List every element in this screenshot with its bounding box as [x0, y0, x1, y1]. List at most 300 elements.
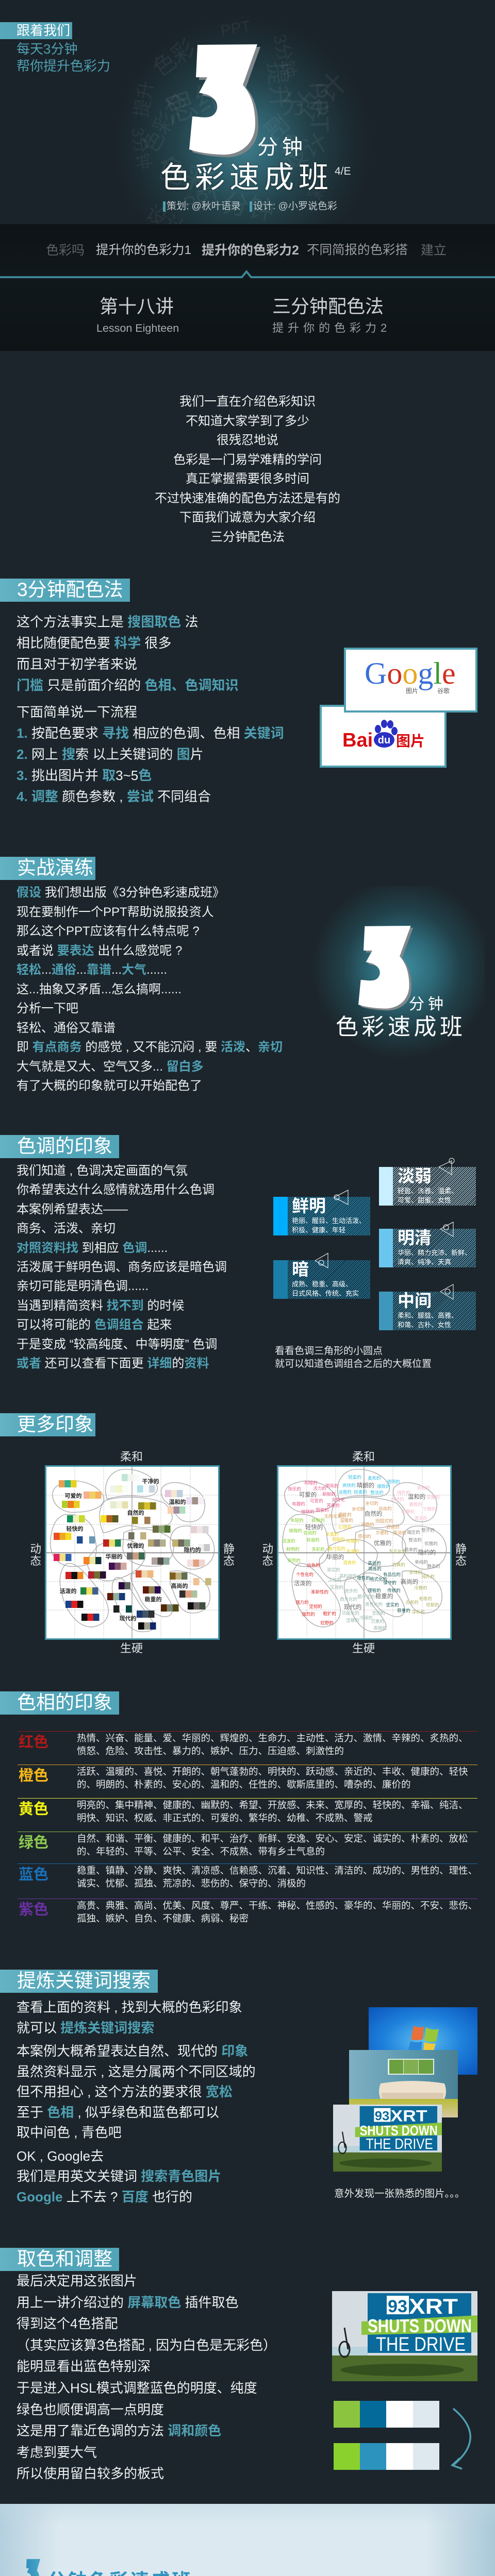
impression names: 可爱的: [299, 1491, 317, 1498]
adjectives: dark teal: 传统的: [387, 1588, 401, 1593]
text: pick and adjust: [16, 2273, 276, 2481]
small minutes: 分钟: [409, 996, 447, 1013]
text: practice case: 分析一下吧: [16, 1002, 78, 1015]
heading: tone impression: 色调的印象: [17, 1136, 112, 1157]
text: tone impression: [16, 1164, 227, 1370]
tag box: [0, 22, 72, 39]
text: tone impression: 对照资料找 到相应 色调......: [16, 1241, 168, 1255]
text: method steps: 相比随便配色要 科学 很多: [16, 635, 171, 651]
adjectives: yellow: [325, 1524, 359, 1565]
text: pick and adjust: 考虑到要大气: [16, 2445, 97, 2460]
adjectives: light pink: 雅致的: [409, 1502, 422, 1507]
text: pick and adjust: （其实应该算3色搭配 , 因为白色是无彩色）: [16, 2337, 276, 2353]
adjectives: yellow: 幸福的: [332, 1537, 345, 1542]
title: minutes: 分钟: [257, 136, 307, 159]
adjectives: pink: 明亮的: [325, 1483, 339, 1488]
chart: color swatch image scale: [31, 1450, 235, 1655]
text: pick and adjust: 用上一讲介绍过的 屏幕取色 插件取色: [16, 2295, 238, 2310]
impression names: 隐约的: [418, 1549, 436, 1556]
adjectives: light pink: 纯朴的: [397, 1490, 410, 1495]
adjectives: dark teal: 简练的: [368, 1566, 382, 1571]
impression names: 高尚的: [171, 1582, 188, 1589]
text: practice case: [16, 886, 283, 1093]
image: windows wallpaper: [369, 2007, 477, 2075]
tag box: 跟着我们: [16, 23, 70, 38]
text: practice case: 假设 我们想出版《3分钟色彩速成班》: [16, 886, 225, 900]
card: baidu images: Bai: [342, 730, 373, 751]
adjectives: grey green: [327, 1567, 387, 1631]
card: baidu images: [320, 705, 447, 768]
adjectives: grey green: 男性化的: [365, 1602, 383, 1607]
adjectives: light pink: 沉静的: [401, 1509, 415, 1514]
row: yellow: 黄色: [19, 1801, 48, 1818]
impression names: 可爱的: [65, 1492, 81, 1499]
adjectives: light pink: [391, 1485, 440, 1521]
adjectives: grey green: 冷漠的: [359, 1615, 373, 1620]
card: dark tone: 暗: [292, 1260, 309, 1279]
adjectives: green: 自由的: [303, 1530, 317, 1535]
intro text: 不过快速准确的配色方法还是有的: [155, 492, 340, 505]
word cloud background: 设计: [292, 67, 353, 128]
adjectives: dark teal: 有品位的: [383, 1572, 401, 1577]
icon: tone triangle: [438, 1158, 455, 1175]
heading: hue impression: 色相的印象: [17, 1692, 112, 1713]
adjectives: olive: 忧郁的: [426, 1602, 439, 1607]
icon: tone triangle: [315, 1253, 328, 1268]
card: pale tone: 可爱、甜蜜、女性: [398, 1196, 451, 1204]
adjectives: dark teal: 理智的: [368, 1588, 381, 1593]
adjectives: green: [282, 1518, 325, 1563]
text: practice case: 轻松...通俗...靠谱...大气......: [16, 963, 167, 977]
adjectives: grey green: 沉重的: [371, 1619, 384, 1624]
text: method steps: 3. 挑出图片并 取3~5色: [16, 768, 152, 783]
row: green: 绿色: [19, 1835, 48, 1851]
adjectives: tan: 感动的: [358, 1534, 371, 1539]
adjectives: yellow: 丰满的: [346, 1549, 359, 1554]
impression names: 隐约的: [184, 1546, 201, 1553]
adjectives: dark teal: 保守的: [383, 1580, 397, 1585]
impression names: 现代的: [344, 1603, 361, 1611]
card: baidu images: du: [378, 735, 390, 746]
adjectives: red: 狂野的: [320, 1620, 334, 1625]
card: pale tone: 淡弱: [398, 1166, 432, 1185]
adjectives: pink: 快乐的: [288, 1486, 301, 1492]
adjectives: grey green: 现实的: [327, 1567, 340, 1572]
adjectives: pink: 和睦的: [304, 1480, 318, 1485]
adjectives: red: 强烈的: [302, 1612, 315, 1617]
adjectives: grey green: 坚固的: [372, 1611, 385, 1616]
text: keyword search: 至于 色相 , 似乎绿色和蓝色都可以: [16, 2104, 219, 2120]
adjectives: grey green: 进步的: [344, 1588, 358, 1594]
word cloud background: PPT: [181, 185, 224, 216]
adjectives: grey: 端庄的: [407, 1530, 420, 1535]
adjectives: soft cyan: 爽快的: [342, 1483, 356, 1488]
adjectives: yellow: 清爽的: [343, 1560, 356, 1565]
impression names: 活泼的: [60, 1587, 76, 1595]
adjectives: tan: 闲静的: [361, 1522, 374, 1527]
adjectives: soft cyan: 整洁的: [370, 1490, 384, 1495]
tag: follow us: [0, 22, 110, 74]
text: method steps: 1. 按配色要求 寻找 相应的色调、色相 关键词: [16, 725, 284, 741]
adjectives: yellow: 幻想的: [338, 1524, 352, 1530]
adjectives: green: 多彩的: [311, 1547, 325, 1552]
lesson title: 三分钟配色法: [272, 296, 384, 317]
adjectives: yellow: 充裕的: [346, 1538, 359, 1544]
row: green: 自然、和谐、平衡、健康的、和平、治疗、新鲜、安逸、安心、安定、诚实的、朴素的、放松: [77, 1833, 468, 1844]
chart: adjective image scale: [263, 1450, 467, 1655]
axis labels: [262, 1450, 467, 1655]
adjectives: dark teal: 格式化的: [370, 1577, 387, 1582]
edition mark: 4/E: [335, 165, 351, 177]
adjectives: tan: 亲切的: [352, 1506, 365, 1512]
word cloud background: PPT: [304, 81, 334, 133]
nav item: 建立: [421, 243, 447, 258]
impression names: 晴朗的: [357, 1482, 374, 1489]
card: dark tone: 成熟、稳重、高级、: [292, 1280, 352, 1288]
adjectives: olive: 东方化的: [389, 1549, 406, 1554]
lesson number: 第十八讲: [100, 296, 174, 317]
word cloud background: 彩: [305, 179, 329, 202]
intro text: 不知道大家学到了多少: [186, 414, 309, 428]
adjectives: dark teal: 高尚的: [368, 1561, 381, 1566]
color bar: [273, 1197, 288, 1235]
adjectives: olive: 古老的: [405, 1600, 419, 1605]
word cloud background: 设计: [278, 128, 333, 175]
card: pale tone: 轻盈、淡雅、温柔、: [398, 1187, 458, 1195]
adjectives: grey green: 都市化的: [357, 1594, 375, 1599]
caption: tone triangle note: 看看色调三角形的小圆点: [275, 1346, 383, 1357]
axis labels: 态: [455, 1554, 467, 1567]
row: red: 愤怒、危险、攻击性、暴力的、嫉妒、压力、压迫感、刺激性的: [77, 1745, 344, 1756]
row: purple: 紫色: [19, 1902, 48, 1918]
text: practice case: 现在要制作一个PPT帮助说服投资人: [16, 905, 214, 919]
adjectives: dark teal: 稳重的: [397, 1608, 410, 1613]
adjectives: olive: 古典的: [392, 1562, 405, 1567]
adjectives: tan: 亲切的: [365, 1501, 378, 1506]
word cloud background: 色彩力: [138, 89, 191, 157]
row: orange: [18, 1765, 477, 1797]
impression names: 华丽的: [105, 1553, 123, 1560]
slogan: 每天3分钟: [16, 41, 77, 57]
impression blobs: [51, 1469, 214, 1632]
card: mid tone: 柔和、朦胧、高雅、: [398, 1312, 458, 1319]
small title: 色彩速成班: [336, 1014, 466, 1040]
text: keyword search: Google 上不去 ? 百度 也行的: [16, 2189, 192, 2204]
adjectives: soft cyan: 透明的: [387, 1479, 400, 1484]
adjectives: red: 革新性的: [311, 1589, 328, 1595]
image: xrt sign small: XRT: [390, 2107, 427, 2125]
impression names: 自然的: [127, 1509, 144, 1516]
adjectives: tan: [324, 1501, 406, 1539]
logo: blue 3: [26, 2559, 40, 2576]
adjectives: green: 年轻的: [290, 1518, 304, 1523]
heading: pick and adjust: 取色和调整: [17, 2248, 112, 2269]
intro text: 下面我们诚意为大家介绍: [179, 511, 316, 524]
heading: practice: 实战演练: [17, 857, 93, 878]
adjectives: grey: 简单的: [404, 1547, 418, 1552]
word cloud background: [128, 18, 353, 224]
caption: familiar image: 意外发现一张熟悉的图片。。。: [334, 2188, 465, 2199]
text: method steps: 下面简单说一下流程: [16, 704, 137, 720]
row: red: [18, 1731, 477, 1764]
icon: tone triangle: [334, 1190, 349, 1205]
axis labels: 柔和: [120, 1450, 143, 1463]
intro text: [155, 395, 340, 544]
image: xrt sign large: 93: [388, 2297, 407, 2316]
adjectives: pink: 愉快的: [301, 1509, 315, 1514]
adjectives: grey green: 高科技的: [339, 1573, 357, 1579]
text: keyword search: 我们是用英文关键词 搜索青色图片: [16, 2168, 221, 2184]
word cloud background: 3分钟: [269, 32, 300, 80]
adjectives: red: 出色的: [307, 1563, 320, 1568]
card: mid tone: [379, 1292, 476, 1330]
adjectives: green: 鲜明的: [286, 1547, 300, 1552]
row: purple: 高贵、典雅、高尚、优美、风度、尊严、干练、神秘、性感的、豪华的、华丽的、不安、悲伤、: [77, 1900, 477, 1911]
impression names: 干净的: [142, 1478, 159, 1485]
adjectives: grey green: 实用的: [330, 1585, 343, 1590]
slogan: 帮你提升色彩力: [16, 58, 110, 74]
table: hue impressions: [18, 1731, 477, 1924]
arrow: adjust palette: [451, 2408, 471, 2470]
panel: hero header: [0, 0, 495, 224]
adjectives: pink: 女性化: [332, 1497, 345, 1502]
adjectives: pink: 活力的: [313, 1486, 326, 1491]
adjectives: red: 个性化的: [296, 1572, 314, 1577]
impression names: 轻快的: [305, 1523, 323, 1531]
row: blue: 诚实、忧郁、孤独、荒凉的、悲伤的、保守的、消极的: [77, 1878, 306, 1889]
impression blobs: [283, 1469, 447, 1632]
image: xrt sign large: THE DRIVE: [376, 2334, 466, 2355]
impression names: 华丽的: [326, 1553, 344, 1561]
adjectives: soft cyan: 柔和的: [368, 1476, 381, 1481]
text: method steps: 而且对于初学者来说: [16, 656, 137, 672]
impression names: 温和的: [169, 1498, 186, 1505]
impression names: 稳重的: [375, 1592, 393, 1600]
text: practice case: 有了大概的印象就可以开始配色了: [16, 1079, 202, 1093]
text: method steps: 4. 调整 颜色参数 , 尝试 不同组合: [16, 789, 211, 804]
adjectives: light pink: 宁静的: [423, 1506, 436, 1512]
logo: small course logo: [299, 886, 485, 1061]
adjectives: grey green: 黑暗的: [373, 1625, 387, 1631]
adjectives: yellow: 丰富的: [325, 1532, 339, 1537]
color bar: [379, 1229, 393, 1267]
row: orange: 的、明朗的、朴素的、安心的、温和的、任性的、歇斯底里的、嘈杂的、廉价的: [77, 1779, 411, 1790]
axis labels: [30, 1450, 235, 1655]
adjectives: dark teal: 理性的: [357, 1575, 370, 1581]
intro text: 色彩是一门易学难精的学问: [173, 452, 322, 467]
palette: adjusted colors: [334, 2443, 439, 2470]
adjectives: green: 和谐的: [306, 1537, 320, 1543]
adjectives: dark teal: [357, 1561, 410, 1613]
small 3: [358, 926, 414, 1011]
adjectives: red: 坚韧的: [309, 1604, 322, 1609]
nav item: 提升你的色彩力1: [96, 243, 191, 257]
color bar: [273, 1260, 288, 1299]
adjectives: grey: 静态的: [427, 1564, 440, 1569]
card: google images: 图片: [406, 687, 418, 694]
text: keyword search: 取中间色 , 青色吧: [16, 2125, 122, 2140]
title: color crash course: 色彩速成班: [160, 161, 333, 194]
text: practice case: 或者说 要表达 出什么感觉呢 ?: [16, 944, 182, 957]
text: tone impression: 于是变成 “较高纯度、中等明度” 色调: [16, 1337, 217, 1351]
adjectives: light pink: 文雅的: [426, 1495, 440, 1500]
word cloud background: PPT: [219, 18, 252, 40]
impression names: 轻快的: [66, 1525, 84, 1532]
row: orange: 活跃、温暖的、喜悦、开朗的、朝气蓬勃的、明快的、跃动感、亲近的、丰收、健康的、轻快: [77, 1766, 468, 1777]
text: pick and adjust: 绿色也顺便调高一点明度: [16, 2402, 164, 2417]
icon: tone triangle: [440, 1222, 454, 1237]
image: xrt sign small: THE DRIVE: [366, 2136, 433, 2153]
text: practice case: 大气就是又大、空气又多... 留白多: [16, 1059, 204, 1074]
palette: original colors: [334, 2401, 439, 2428]
adjectives: soft cyan: 淡雅的: [338, 1489, 352, 1495]
card: vivid tone: 艳丽、醒目、生动活泼、: [292, 1217, 366, 1225]
word cloud background: 色彩: [153, 150, 218, 201]
text: keyword search: 虽然资料显示 , 这是分属两个不同区域的: [16, 2064, 256, 2079]
text: tone impression: 可以将可能的 色调组合 起来: [16, 1318, 172, 1332]
row: red: 红色: [19, 1734, 48, 1751]
caption: tone triangle note: 就可以知道色调组合之后的大概位置: [275, 1359, 432, 1369]
card: google images: Google: [365, 656, 456, 690]
adjectives: grey green: 功能化的: [342, 1611, 359, 1616]
adjectives: pink: 甜蜜的: [316, 1507, 329, 1513]
text: keyword search: OK , Google去: [16, 2148, 104, 2164]
word cloud background: 提升: [130, 79, 157, 119]
card: mid tone: 中间: [398, 1291, 432, 1310]
panel: next-episode banner: [0, 2504, 495, 2576]
row: yellow: 明亮的、集中精神、健康的、幽默的、希望、开放感、未来、宽厚的、轻快的、幸福、纯洁、: [77, 1800, 468, 1810]
text: pick and adjust: 这是用了靠近色调的方法 调和颜色: [16, 2423, 221, 2438]
adjectives: olive: [389, 1549, 439, 1615]
word cloud background: 思维: [160, 75, 233, 130]
card: bright tone: 清爽、纯净、天真: [398, 1258, 451, 1266]
axis labels: 生硬: [120, 1642, 143, 1655]
heading: keyword search: 提炼关键词搜索: [17, 1970, 151, 1991]
color bar: [379, 1292, 393, 1330]
text: tone impression: 或者 还可以查看下面更 详细的资料: [16, 1357, 209, 1370]
adjectives: tan: 自由的: [378, 1506, 392, 1511]
impression names: 优雅的: [374, 1539, 391, 1547]
axis labels: 生硬: [352, 1642, 375, 1655]
word cloud background: 3分钟: [128, 126, 154, 171]
adjectives: red: 粗犷的: [323, 1611, 336, 1616]
image: xrt sign large: XRT: [409, 2294, 458, 2318]
image: xrt sign large: [332, 2291, 477, 2381]
adjectives: light pink: 清洁的: [414, 1516, 427, 1521]
row: yellow: [18, 1798, 477, 1831]
text: pick and adjust: 所以使用留白较多的板式: [16, 2466, 164, 2481]
card: dark tone: 日式风格、传统、充实: [292, 1290, 359, 1297]
lesson english: Lesson Eighteen: [96, 322, 179, 334]
card: google images: 谷歌: [437, 687, 450, 694]
caption: tone triangle note: [275, 1346, 432, 1369]
adjectives: soft cyan: 轻盈的: [348, 1475, 361, 1480]
text: practice case: 轻松、通俗又靠谱: [16, 1021, 116, 1035]
chart frame: [45, 1466, 219, 1639]
row: green: [18, 1832, 477, 1864]
row: blue: [18, 1863, 477, 1896]
word cloud background: 色彩: [148, 35, 200, 81]
adjectives: grey green: 工化的: [328, 1577, 341, 1582]
impression names: [60, 1478, 201, 1622]
adjectives: yellow: 魅力型的: [328, 1546, 345, 1551]
adjectives: soft cyan: 轻柔的: [354, 1489, 367, 1495]
card: vivid tone: [273, 1197, 370, 1235]
text: keyword search: [16, 1999, 256, 2204]
intro text: 三分钟配色法: [210, 530, 285, 544]
adjectives: dark teal: 坚实的: [386, 1602, 399, 1607]
text: tone impression: 本案例希望表达——: [16, 1202, 128, 1216]
row: green: 的、年轻的、平等、公平、安全、不成熟、带有乡土气息的: [77, 1846, 325, 1857]
adjectives: pink: 有趣的: [292, 1501, 305, 1506]
axis labels: 柔和: [352, 1450, 375, 1463]
text: tone impression: 亲切可能是明清色调......: [16, 1279, 148, 1293]
row: orange: 橙色: [19, 1768, 48, 1784]
text: pick and adjust: 于是进入HSL模式调整蓝色的明度、纯度: [16, 2380, 257, 2396]
adjectives: soft cyan: [338, 1475, 400, 1495]
text: tone impression: 活泼属于鲜明色调、商务应该是暗色调: [16, 1260, 227, 1274]
adjectives: light pink: 舒适的: [391, 1497, 404, 1502]
slogan: [16, 41, 110, 74]
text: keyword search: 就可以 提炼关键词搜索: [16, 2020, 154, 2035]
text: practice case: 这...抽象又矛盾...怎么搞啊......: [16, 982, 182, 996]
adjectives: red: [295, 1563, 336, 1625]
text: method steps: 这个方法事实上是 搜图取色 法: [16, 614, 198, 630]
adjectives: olive: 淳朴的: [411, 1609, 425, 1615]
impression names: 温和的: [408, 1493, 425, 1500]
impression names: 现代的: [120, 1615, 136, 1622]
row: purple: 孤独、嫉妒、自负、不健康、病弱、秘密: [77, 1913, 249, 1924]
row: blue: 蓝色: [19, 1867, 48, 1883]
adjectives: pink: 芳香的: [326, 1503, 340, 1508]
nav item current: 提升你的色彩力2: [202, 243, 299, 258]
adjectives: green: 微微的: [289, 1528, 302, 1533]
impression names: 高尚的: [401, 1578, 418, 1585]
row: blue: 稳重、镇静、冷静、爽快、清凉感、信赖感、沉着、知识性、清洁的、成功的、男性的、理性、: [77, 1865, 477, 1876]
adjectives: soft cyan: 细致的: [377, 1484, 390, 1489]
panel: lesson navigation band: [0, 224, 495, 351]
card: bright tone: 明清: [398, 1228, 432, 1247]
adjectives: red: 强力的: [295, 1600, 309, 1605]
axis labels: 静: [455, 1543, 467, 1555]
text: pick and adjust: 得到这个4色搭配: [16, 2316, 118, 2331]
credit: planner: 策划: @秋叶语录: [167, 201, 241, 212]
adjectives: grey green: 坚硬的: [346, 1618, 359, 1623]
adjectives: tan: 方便的: [375, 1530, 389, 1535]
big 3 logo: [189, 44, 260, 158]
impression names: 稳重的: [144, 1596, 162, 1603]
text: tone impression: 商务、活泼、亲切: [16, 1222, 116, 1235]
impression names: 优雅的: [127, 1542, 144, 1549]
adjectives: tan: 田园式的: [375, 1518, 393, 1523]
heading: 3-minute method: 3分钟配色法: [17, 579, 123, 600]
card: vivid tone: 鲜明: [292, 1196, 326, 1215]
adjectives: grey: [404, 1528, 440, 1569]
lesson subtitle: 提升你的色彩力2: [272, 321, 391, 334]
adjectives: light pink: 亲和的: [417, 1485, 430, 1490]
nav item: 色彩吗: [46, 243, 85, 258]
adjectives: tan: 无拘无束的: [324, 1514, 346, 1519]
adjectives: olive: 冷静的: [414, 1585, 427, 1590]
credit: designer: 设计: @小罗说色彩: [253, 201, 337, 212]
heading: more impressions: 更多印象: [17, 1414, 93, 1435]
nav item: 不同简报的色彩搭: [307, 243, 408, 257]
adjectives: grey green: 西方化的: [340, 1597, 357, 1602]
adjectives: tan: 温暖的: [340, 1518, 353, 1523]
card: pale tone: [379, 1167, 476, 1206]
row: yellow: 明快、知识、权威、非正式的、可爱的、繁华的、幼稚、不成熟、警戒: [77, 1812, 373, 1823]
adjectives: tan: 简洁的: [393, 1530, 406, 1535]
